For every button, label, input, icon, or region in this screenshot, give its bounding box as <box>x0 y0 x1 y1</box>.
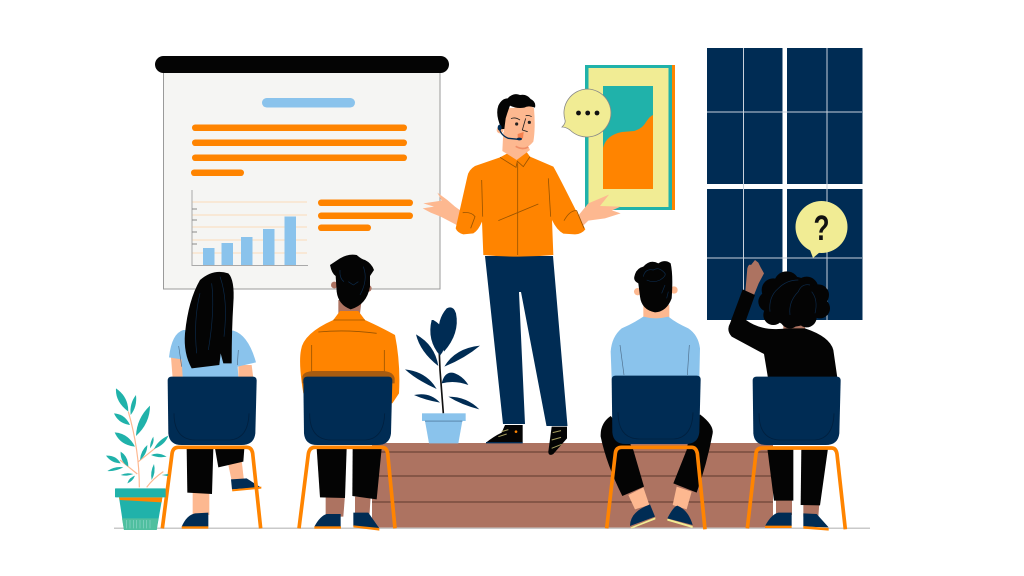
teal potted plant <box>106 388 168 530</box>
woman shirt <box>169 330 256 377</box>
audience member 4: woman raising hand <box>728 260 845 531</box>
afro hair <box>758 271 830 328</box>
man 2 lower legs <box>326 495 371 517</box>
presenter hands <box>423 193 621 229</box>
woman hair <box>185 272 234 368</box>
teal pot <box>115 488 166 530</box>
question bubble: ? <box>814 209 830 248</box>
presenter hair <box>497 94 535 129</box>
chair 1 <box>162 377 261 528</box>
headset <box>498 125 522 140</box>
slide title bar <box>262 98 355 108</box>
stage <box>372 443 773 528</box>
man 3 shirt <box>611 317 700 378</box>
presenter shirt <box>456 152 585 257</box>
window <box>707 48 862 320</box>
woman trousers <box>187 448 244 494</box>
man 2 head <box>330 255 374 309</box>
woman arms and legs <box>171 357 253 515</box>
woman shoes <box>182 478 261 529</box>
screen roller <box>155 56 449 73</box>
audience member 3: man in blue shirt <box>601 261 713 529</box>
man 2 shirt <box>300 311 399 403</box>
audience member 1: woman with long hair <box>162 272 261 529</box>
potted plant: dark leaves <box>405 307 480 443</box>
wall painting <box>585 65 675 210</box>
projection screen <box>155 56 449 289</box>
man 3 shoes <box>630 504 693 529</box>
audience member 2: man in orange shirt <box>299 300 399 531</box>
man 2 trousers <box>317 448 382 499</box>
presenter trousers <box>485 256 568 426</box>
question bubble <box>796 201 848 258</box>
presenter facial features <box>511 115 532 132</box>
chair 4 <box>747 377 845 529</box>
man 2 neck <box>338 300 362 313</box>
bar chart <box>192 190 308 266</box>
chair 2 <box>299 377 395 528</box>
chair 3 <box>607 376 705 529</box>
presenter neck and face <box>497 103 535 160</box>
shoes <box>765 513 829 531</box>
man 3 trousers <box>601 414 713 496</box>
raised hand <box>745 260 764 295</box>
man 3 hair <box>634 261 672 312</box>
presenter head <box>497 94 535 160</box>
speech bubble with dots <box>562 89 611 137</box>
black top and arm <box>728 289 838 380</box>
neck <box>783 322 805 332</box>
presenter shoes <box>486 425 567 455</box>
lower legs <box>776 498 819 517</box>
man 2 shoes <box>314 513 379 531</box>
man 3 ears and neck <box>634 286 678 320</box>
ground line <box>114 528 870 529</box>
slide side text lines <box>318 200 413 231</box>
trousers <box>767 448 828 505</box>
plant pot <box>422 413 466 443</box>
man 3 shins <box>628 487 692 509</box>
slide text lines <box>191 124 407 176</box>
presenter <box>423 94 621 455</box>
